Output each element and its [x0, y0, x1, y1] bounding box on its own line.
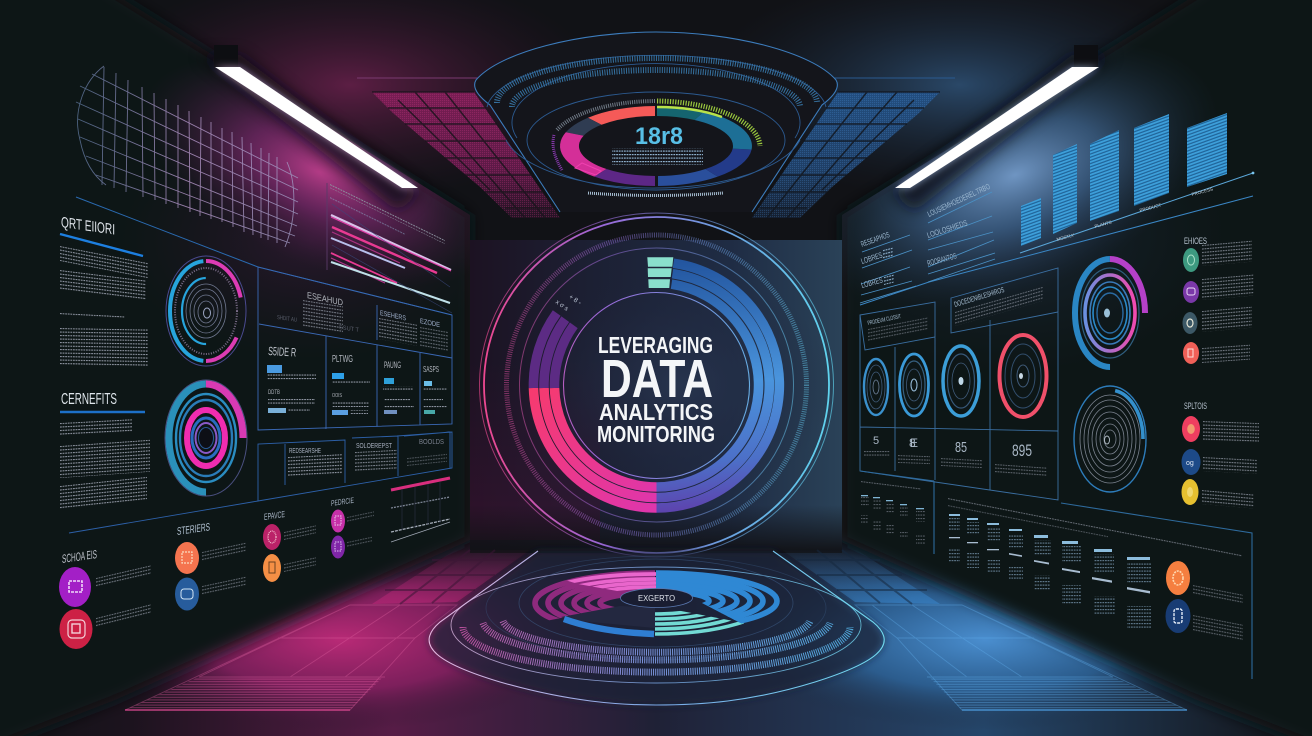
panel text	[955, 287, 1043, 326]
panel heading: DOCEDENIBLESHIROS	[953, 285, 1005, 309]
side note headings: LOBRES	[860, 251, 884, 266]
cell values: 85	[955, 439, 967, 456]
dial: small two	[900, 354, 928, 416]
icon: navy: og	[1186, 460, 1194, 467]
column bars	[949, 537, 1150, 593]
section: group A	[59, 547, 151, 649]
small marks: + 8 ◦	[567, 293, 582, 307]
icon: slate	[1182, 312, 1198, 334]
teal blocks	[647, 257, 673, 288]
cell captions	[864, 451, 1047, 478]
axis labels: PRODUCT	[1139, 202, 1162, 213]
icon: purple	[59, 567, 91, 607]
section: group D	[331, 496, 374, 558]
gauge lime accents	[657, 107, 722, 117]
heading: middle-left: CERNEFITS	[61, 391, 117, 408]
cell four: SASPS	[423, 364, 439, 374]
dark wedge	[561, 606, 655, 628]
wall divider line	[76, 197, 452, 315]
ceiling light: left	[200, 45, 420, 212]
text block	[60, 440, 150, 478]
frame	[429, 551, 884, 705]
side note headings: LOBRES	[860, 276, 884, 290]
gauge frame	[475, 32, 837, 212]
dial chart: upper left	[166, 256, 246, 366]
gauge backing	[475, 32, 837, 212]
teal wedge	[655, 610, 744, 636]
cell two: OOIS	[332, 393, 342, 399]
gauge value: 18r8	[635, 123, 683, 150]
outer rings	[480, 213, 834, 557]
cell values: 895	[1012, 441, 1032, 460]
cell values	[873, 435, 1032, 460]
central ring chart	[480, 213, 834, 557]
small table	[861, 481, 925, 544]
small marks: x σ s	[554, 299, 570, 313]
lower notes panel	[69, 432, 452, 533]
inner ring	[564, 292, 750, 478]
side note headings: LOUSIEMHOEDEREL.TRBO	[926, 182, 991, 219]
table frame	[258, 267, 452, 430]
magenta rings	[532, 570, 655, 620]
panel: left wall	[59, 66, 452, 649]
icon: navy	[1166, 599, 1190, 633]
title: ANALYTICS	[599, 399, 713, 425]
cell one: S5IDE R	[268, 344, 297, 359]
side note headings: RESEAPHOS	[860, 230, 891, 249]
axis labels	[1056, 186, 1214, 242]
lower notes panel: BOOLDS	[419, 439, 444, 446]
table heading: ESEAHUD	[307, 290, 343, 308]
sub panel text	[420, 327, 448, 352]
text block	[60, 270, 146, 301]
ceiling tiles: left pink	[357, 78, 560, 218]
table panel	[258, 267, 452, 430]
text block	[60, 313, 125, 319]
title: DATA	[601, 349, 713, 409]
panel text	[868, 317, 928, 341]
icon: pink	[1182, 416, 1200, 442]
top gauge	[475, 32, 837, 212]
mini table	[391, 478, 450, 542]
bar chart	[1020, 113, 1254, 253]
legend: lower right: SPLTOIS	[1184, 401, 1207, 411]
lower notes panel: REDSEARSHE	[289, 446, 321, 455]
icon: green	[1183, 248, 1199, 272]
cell values: 8E	[909, 436, 918, 450]
gauge inner arcs	[487, 55, 826, 190]
section: group B	[175, 521, 246, 610]
title	[597, 332, 715, 447]
cell one	[267, 344, 316, 413]
sub panel: EZODE	[420, 318, 440, 329]
dial: small one	[864, 359, 888, 415]
dial: red	[1000, 335, 1046, 417]
bottom floor gauge	[429, 551, 884, 705]
icon: yellow	[1182, 479, 1198, 505]
column headers	[949, 514, 1150, 560]
legend: lower right	[1182, 401, 1259, 509]
chart panel frame	[860, 268, 1058, 500]
cell four	[423, 364, 447, 414]
text block	[60, 419, 132, 436]
section: group C	[263, 509, 316, 582]
panel heading: PRODEUM CLOSSIT	[867, 314, 902, 327]
wall divider line	[860, 196, 1253, 305]
icon: purple	[1183, 281, 1199, 303]
cell two	[332, 354, 370, 415]
title: MONITORING	[597, 421, 715, 447]
frame backing	[429, 551, 884, 705]
blue bottom band	[564, 619, 654, 634]
panel text strips	[948, 498, 1242, 558]
purple arc bands	[533, 313, 574, 388]
legend: upper right	[1182, 236, 1254, 364]
lower data panel	[860, 471, 1252, 679]
icon: orange	[263, 554, 281, 582]
ceiling light: right	[892, 45, 1112, 212]
section: group B: STERIERS	[177, 521, 210, 538]
label: SSUT T	[339, 325, 359, 334]
cell three: PAUNG	[384, 360, 401, 370]
gauge caption lines	[612, 148, 703, 165]
cell values: 5	[873, 435, 879, 447]
light pink wedge	[567, 572, 656, 591]
wire mesh grid	[76, 66, 298, 247]
heading: top-left: QRT EIIORI	[61, 214, 115, 239]
dial chart: lower right	[1074, 386, 1146, 492]
icon: violet	[331, 536, 345, 558]
heading underline	[60, 411, 145, 413]
title: LEVERAGING	[598, 332, 713, 358]
ceiling tiles: right blue	[752, 78, 955, 218]
axis labels: PROCESS	[1191, 186, 1214, 197]
side note headings: ROORANTOS	[926, 251, 957, 268]
side note headings: LOOLOSHIEDS	[926, 218, 969, 240]
dotted bands	[463, 621, 850, 672]
axis labels: PLANTS	[1094, 220, 1112, 229]
dial chart: upper right	[1075, 259, 1145, 367]
blue arc bands	[656, 263, 779, 508]
panel: right wall	[860, 113, 1259, 679]
gauge highlight box	[575, 163, 601, 175]
section: group C: EPAVCE	[264, 509, 285, 522]
bar lines panel	[327, 183, 452, 313]
icon: coral	[1183, 342, 1199, 364]
gauge ring segments	[560, 106, 752, 186]
text block	[60, 328, 148, 368]
heading underline	[60, 234, 143, 256]
thin rings	[519, 559, 793, 647]
text block	[60, 477, 147, 510]
icon: red	[60, 609, 92, 649]
side note headings	[860, 182, 991, 290]
dial: small three	[943, 346, 979, 416]
sub panel text	[379, 318, 417, 346]
floor grid: left	[125, 550, 530, 710]
section: group D: PEDRCIE	[331, 496, 354, 508]
icon: orange	[175, 542, 199, 574]
lower notes panel: SOLOEREPST	[356, 441, 392, 450]
side notes top	[860, 192, 995, 303]
label: SHDIT AU	[277, 315, 297, 324]
dotted ring	[506, 235, 806, 535]
cell one: DDTB	[268, 390, 280, 396]
chart axis	[1020, 173, 1253, 253]
cell three	[383, 360, 414, 414]
text block	[60, 246, 148, 278]
icon: magenta	[331, 510, 345, 532]
icon: crimson	[263, 524, 281, 550]
icon: blue	[175, 578, 199, 610]
column text	[949, 518, 1151, 629]
inner ellipse	[451, 567, 861, 683]
pink arc bands	[534, 388, 656, 508]
icon: orange	[1166, 561, 1190, 595]
sub panel: ESEHERS	[380, 310, 406, 323]
table figures	[303, 300, 343, 333]
blue rings	[656, 570, 780, 624]
cell two: PLTWG	[332, 354, 353, 365]
small marks	[554, 289, 582, 317]
center hub	[620, 588, 692, 608]
gauge dotted bands	[497, 58, 817, 103]
legend: upper right: EHIOES	[1184, 236, 1207, 246]
axis labels: MOSTLY	[1056, 232, 1075, 242]
section: group A: SCHOA EIS	[62, 547, 97, 566]
dial chart: lower left	[165, 380, 247, 496]
note highlights	[883, 248, 894, 285]
hub label: EXGERTO	[638, 594, 675, 603]
floor grid: right	[782, 550, 1187, 710]
